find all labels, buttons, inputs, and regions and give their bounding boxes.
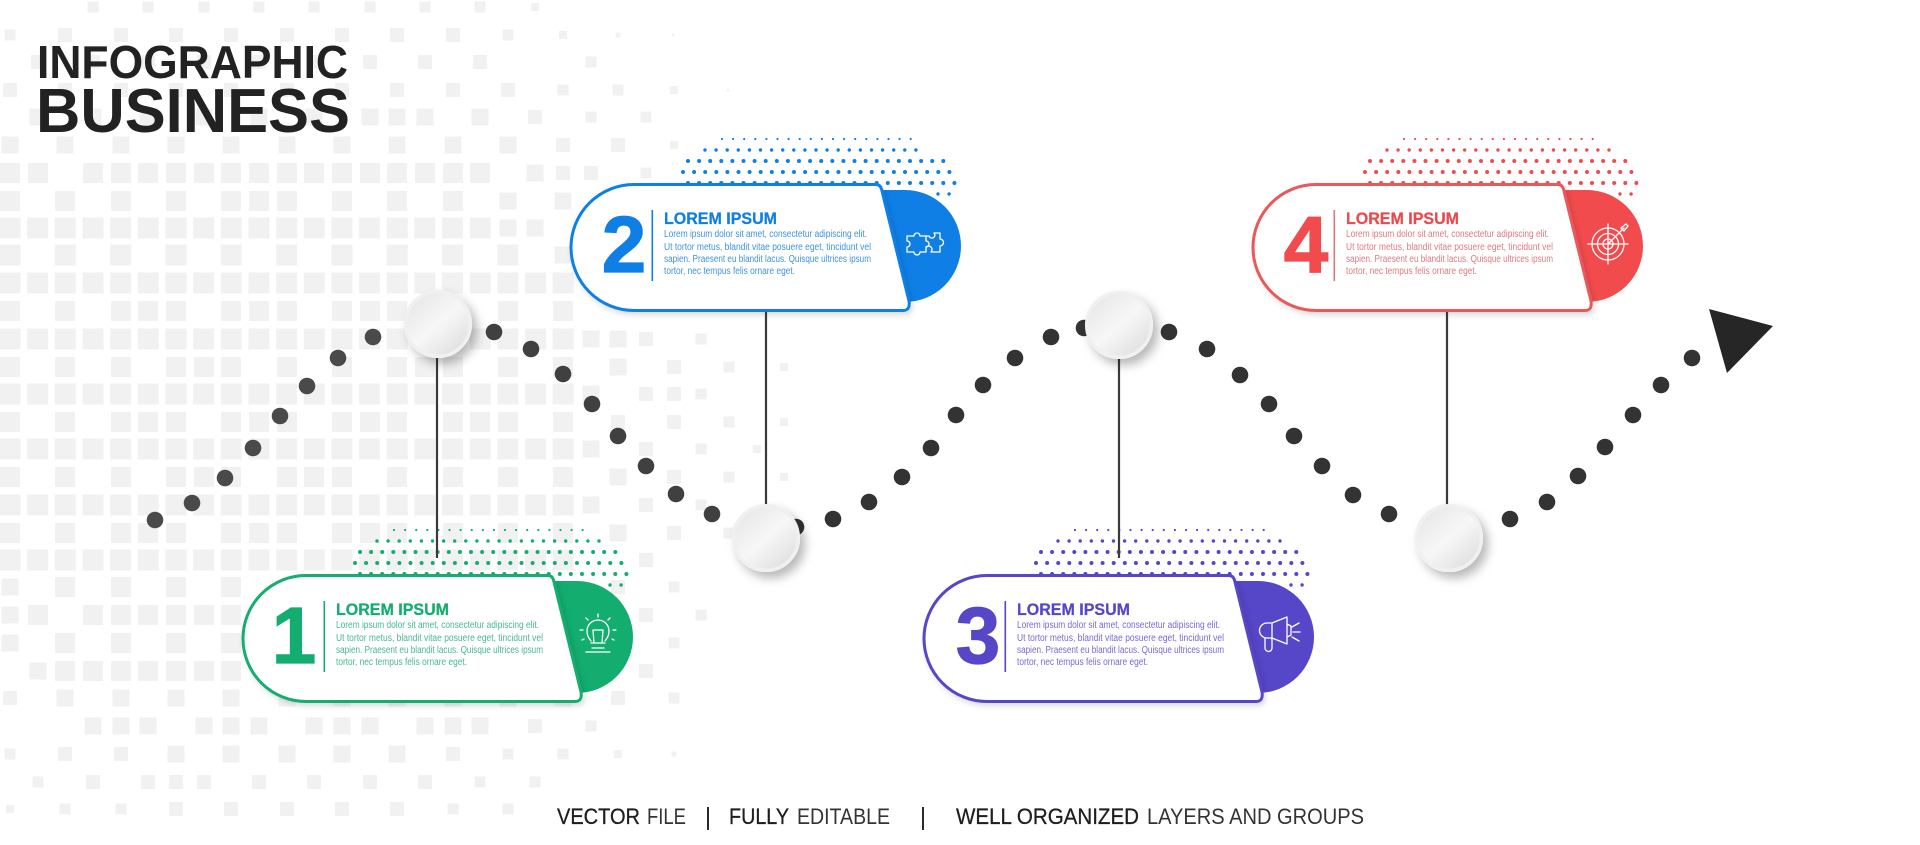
number 3: 3 xyxy=(956,591,1000,680)
connector lines xyxy=(437,312,1447,558)
icon: target xyxy=(1588,224,1628,264)
heading: LOREM IPSUM xyxy=(664,209,777,228)
body text xyxy=(1017,620,1224,668)
icon: light bulb xyxy=(580,614,616,652)
footer text: FILE xyxy=(647,804,686,829)
body text: Ut tortor metus, blandit vitae posuere eget, tincidunt vel xyxy=(1017,633,1224,644)
node 4 xyxy=(1417,506,1481,570)
card 4 xyxy=(1253,139,1643,310)
node 3 xyxy=(1087,293,1151,357)
heading: LOREM IPSUM xyxy=(1017,600,1130,619)
body text: sapien. Praesent eu blandit lacus. Quisque ultrices ipsum xyxy=(1346,254,1553,265)
number 1: 1 xyxy=(272,591,316,680)
heading: LOREM IPSUM xyxy=(336,600,449,619)
body text: Lorem ipsum dolor sit amet, consectetur adipiscing elit. xyxy=(664,229,867,240)
card 3 xyxy=(924,530,1314,702)
card 1 xyxy=(243,530,633,702)
icon: megaphone xyxy=(1260,617,1300,652)
body text: sapien. Praesent eu blandit lacus. Quisque ultrices ipsum xyxy=(1017,645,1224,656)
footer text xyxy=(557,804,1364,830)
body text: Ut tortor metus, blandit vitae posuere eget, tincidunt vel xyxy=(664,242,871,253)
number 4: 4 xyxy=(1284,200,1329,289)
node 2 xyxy=(734,506,798,570)
body text: Ut tortor metus, blandit vitae posuere eget, tincidunt vel xyxy=(1346,242,1553,253)
body text: tortor, nec tempus felis ornare eget. xyxy=(1346,266,1477,277)
body text: Lorem ipsum dolor sit amet, consectetur adipiscing elit. xyxy=(1017,620,1220,631)
title: BUSINESS xyxy=(36,77,350,146)
body text: Lorem ipsum dolor sit amet, consectetur adipiscing elit. xyxy=(336,620,539,631)
footer text: FULLY xyxy=(729,804,789,829)
title xyxy=(36,36,350,146)
body text xyxy=(1346,229,1553,277)
footer text: VECTOR xyxy=(557,804,640,829)
body text: sapien. Praesent eu blandit lacus. Quisque ultrices ipsum xyxy=(664,254,871,265)
body text: Lorem ipsum dolor sit amet, consectetur adipiscing elit. xyxy=(1346,229,1549,240)
icon: puzzle xyxy=(907,233,944,255)
body text: sapien. Praesent eu blandit lacus. Quisque ultrices ipsum xyxy=(336,645,543,656)
node 1 xyxy=(406,292,470,356)
heading: LOREM IPSUM xyxy=(1346,209,1459,228)
body text: tortor, nec tempus felis ornare eget. xyxy=(336,657,467,668)
body text xyxy=(336,620,543,668)
title: INFOGRAPHIC xyxy=(37,36,348,88)
body text: tortor, nec tempus felis ornare eget. xyxy=(1017,657,1148,668)
body text: tortor, nec tempus felis ornare eget. xyxy=(664,266,795,277)
number 2: 2 xyxy=(602,200,646,289)
card 2 xyxy=(571,139,961,310)
body text: Ut tortor metus, blandit vitae posuere eget, tincidunt vel xyxy=(336,633,543,644)
dotted path xyxy=(147,320,1700,535)
footer text: LAYERS AND GROUPS xyxy=(1147,804,1364,829)
footer text: WELL ORGANIZED xyxy=(956,804,1139,829)
body text xyxy=(664,229,871,277)
arrow head xyxy=(1709,309,1773,373)
footer text: EDITABLE xyxy=(797,804,890,829)
